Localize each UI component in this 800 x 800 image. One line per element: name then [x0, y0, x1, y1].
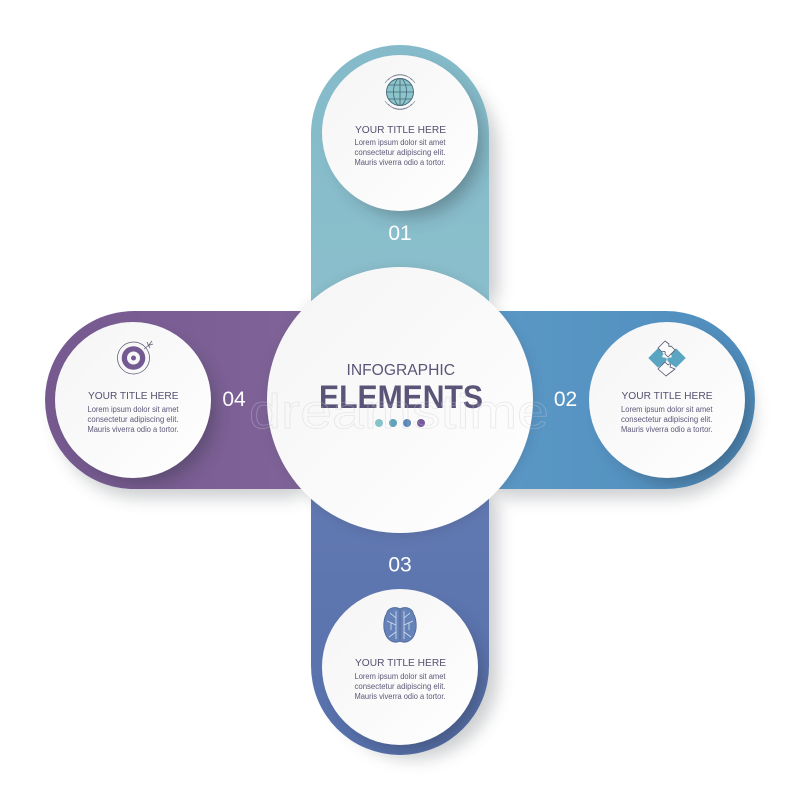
body text: Lorem ipsum dolor sit amet	[88, 405, 179, 414]
body text: Lorem ipsum dolor sit amet	[621, 405, 713, 414]
number 02: 02	[554, 388, 577, 411]
circle shadows clipped to bars	[71, 72, 749, 750]
body text: consectetur adipiscing elit.	[354, 148, 446, 157]
panel: 02 right bar	[490, 311, 755, 489]
body text: Mauris viverra odio a tortor.	[621, 425, 712, 434]
bar shadows	[56, 66, 754, 759]
body text: Lorem ipsum dolor sit amet	[354, 672, 446, 681]
body text: consectetur adipiscing elit.	[621, 415, 712, 424]
icon: puzzle	[649, 341, 685, 376]
title text: YOUR TITLE HERE	[355, 657, 446, 669]
icon: brain	[384, 608, 416, 642]
panel: center circle	[267, 267, 533, 533]
panel: bottom circle	[322, 589, 478, 745]
icon: globe	[385, 75, 415, 109]
number 04: 04	[222, 388, 246, 411]
center circle shadow	[268, 269, 534, 535]
body text	[354, 138, 446, 167]
body text: Lorem ipsum dolor sit amet	[354, 138, 446, 147]
panel: left circle	[55, 322, 211, 478]
body text: Mauris viverra odio a tortor.	[354, 692, 446, 701]
panel: 03 bottom bar	[311, 490, 489, 755]
watermark: dreamstime	[249, 386, 549, 439]
body text: consectetur adipiscing elit.	[354, 682, 446, 691]
body text	[621, 405, 713, 434]
panel: 01 top bar	[311, 45, 489, 310]
body text: Mauris viverra odio a tortor.	[354, 158, 446, 167]
title text: YOUR TITLE HERE	[355, 124, 446, 136]
panel: top circle	[322, 55, 478, 211]
body text	[354, 672, 446, 701]
body text: consectetur adipiscing elit.	[88, 415, 178, 424]
title text: YOUR TITLE HERE	[88, 390, 178, 402]
heading: infographic: INFOGRAPHIC	[346, 362, 455, 379]
body text	[88, 405, 179, 434]
icon: target	[118, 341, 153, 374]
body text: Mauris viverra odio a tortor.	[88, 425, 178, 434]
panel: right circle	[589, 322, 745, 478]
four coloured dots	[375, 419, 425, 427]
panel: 04 left bar	[45, 311, 310, 489]
number 01: 01	[388, 222, 412, 245]
title text: YOUR TITLE HERE	[622, 390, 712, 402]
heading: elements: ELEMENTS	[319, 379, 483, 415]
number 03: 03	[388, 554, 412, 576]
